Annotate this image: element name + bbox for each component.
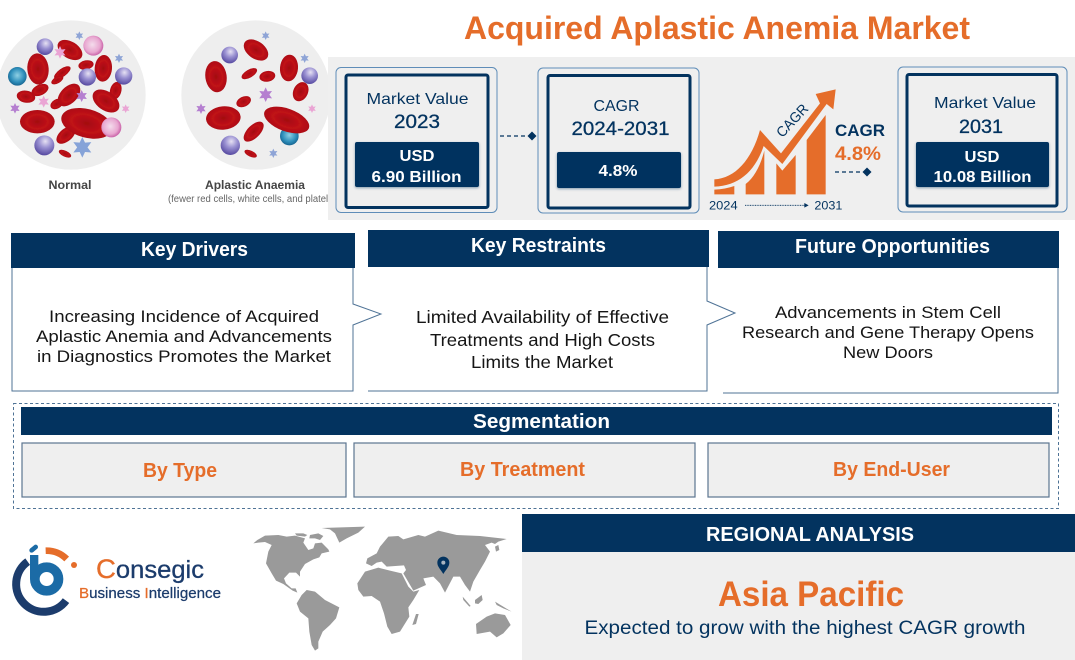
connector: market value to CAGR — [500, 132, 536, 140]
card: market value 2023: 2023 — [394, 112, 440, 133]
card: market value 2023 — [336, 68, 497, 212]
segment: by end-user: By End-User — [833, 459, 950, 481]
card: CAGR 2024-2031: 2024-2031 — [572, 119, 670, 140]
panel: key restraints: Limits the Market — [471, 352, 613, 372]
card: market value 2031 — [898, 67, 1067, 212]
panel: key drivers: in Diagnostics Promotes the Market — [37, 347, 331, 366]
illustration: normal blood cells — [0, 20, 146, 170]
card: market value 2023: USD — [400, 148, 434, 165]
card: market value 2031: 10.08 Billion — [934, 169, 1032, 186]
americas and greenland — [253, 527, 365, 651]
label: Aplastic Anaemia: Aplastic Anaemia — [205, 178, 305, 192]
panel: key drivers: Key Drivers — [141, 239, 248, 261]
card: market value 2031: Market Value — [934, 95, 1036, 112]
card: market value 2023: Market Value — [366, 91, 469, 108]
card: market value 2031: 2031 — [959, 117, 1003, 138]
illustration: aplastic anaemia blood cells — [181, 20, 331, 170]
panel: segmentation: Segmentation — [473, 411, 610, 433]
caption: fewer cells: (fewer red cells, white cells, and platelets) — [168, 194, 344, 205]
panel: regional analysis — [522, 514, 1075, 660]
panel: segmentation — [14, 404, 1058, 508]
panel: future opportunities: Research and Gene Therapy Opens — [742, 323, 1034, 342]
eurasia, africa and oceania — [357, 531, 512, 637]
segment: by end-user — [708, 443, 1049, 497]
title: Acquired Aplastic Anemia Market — [464, 10, 970, 46]
segment: by treatment: By Treatment — [460, 459, 585, 481]
card: CAGR 2024-2031: CAGR — [594, 98, 640, 115]
panel: key restraints — [368, 230, 735, 391]
panel: key drivers: Increasing Incidence of Acquired — [49, 307, 319, 326]
panel: regional analysis: REGIONAL ANALYSIS — [706, 524, 914, 546]
panel: future opportunities: New Doors — [843, 343, 933, 362]
callout: CAGR 4.8%: CAGR — [835, 121, 885, 140]
panel: market metrics background — [328, 57, 1075, 220]
panel: key restraints: Key Restraints — [471, 235, 606, 257]
chart: CAGR growth arrow and bars: CAGR — [774, 101, 812, 141]
chart: CAGR growth arrow and bars: 2024 — [709, 198, 738, 212]
panel: future opportunities — [718, 231, 1059, 393]
logo: Consegic Business Intelligence: Business Intelligence — [79, 586, 221, 602]
panel: key restraints: Treatments and High Costs — [430, 330, 655, 350]
segment: by type: By Type — [143, 460, 217, 482]
panel: key drivers: Aplastic Anemia and Advancements — [36, 327, 332, 346]
callout: CAGR 4.8%: 4.8% — [835, 144, 881, 165]
panel: future opportunities: Advancements in Stem Cell — [775, 303, 1001, 322]
panel: regional analysis: Asia Pacific — [718, 575, 904, 614]
segment: by treatment — [354, 443, 695, 497]
panel: key restraints: Limited Availability of Effective — [416, 307, 669, 327]
callout: CAGR 4.8% — [835, 121, 885, 176]
panel: regional analysis: Expected to grow with the highest CAGR growth — [584, 618, 1026, 639]
card: CAGR 2024-2031 — [538, 68, 699, 213]
card: CAGR 2024-2031: 4.8% — [598, 163, 638, 180]
card: market value 2031: USD — [964, 149, 1000, 166]
segment: by type — [22, 443, 346, 497]
chart: CAGR growth arrow and bars — [709, 89, 843, 212]
card: market value 2023: 6.90 Billion — [372, 169, 462, 186]
logo: Consegic Business Intelligence — [16, 547, 221, 612]
label: Normal: Normal — [48, 178, 92, 192]
chart: CAGR growth arrow and bars: 2031 — [814, 198, 843, 212]
panel: key drivers — [11, 233, 381, 391]
logo: Consegic Business Intelligence: Consegic — [96, 554, 204, 584]
panel: future opportunities: Future Opportunities — [795, 236, 990, 258]
icon: logo mark — [16, 547, 77, 612]
map: world with Asia Pacific pin — [253, 527, 512, 651]
